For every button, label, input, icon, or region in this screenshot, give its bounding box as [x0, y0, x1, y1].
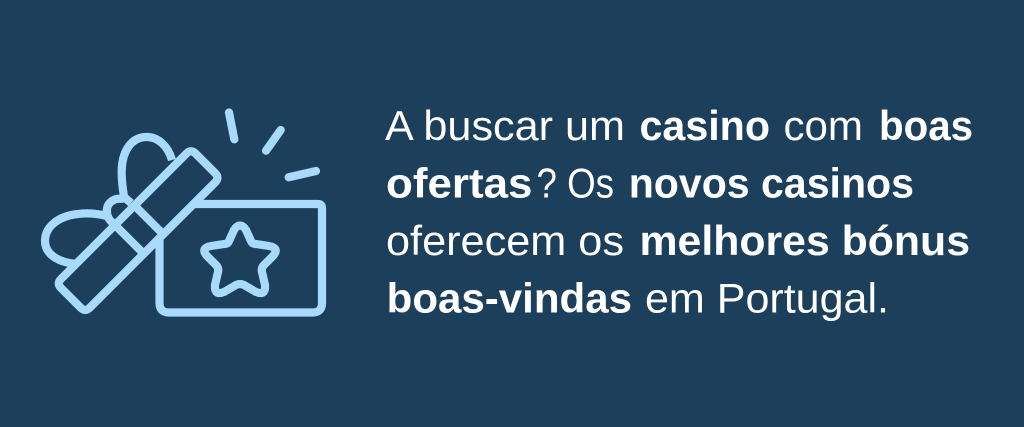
icon: star: [204, 226, 276, 293]
line 1: A buscar um: [385, 102, 625, 149]
line 3: oferecem os: [386, 217, 624, 264]
line 4: em Portugal.: [645, 274, 889, 322]
line 2: ofertas: [386, 160, 532, 206]
icon: ribbon band: [115, 206, 163, 254]
line 3: [386, 217, 970, 264]
line 2: [386, 160, 914, 206]
icon: open gift box: [45, 112, 322, 312]
line 1: com: [784, 102, 863, 149]
line 1: casino: [640, 102, 770, 149]
line 4: [387, 274, 889, 322]
line 1: boas: [879, 102, 973, 149]
icon: rotated lid: [59, 151, 217, 310]
line 3: melhores bónus: [640, 217, 970, 264]
icon: top bow loop: [122, 137, 172, 203]
line 2: ? Os: [536, 160, 614, 206]
line 4: boas-vindas: [387, 274, 632, 322]
line 2: novos casinos: [629, 160, 914, 206]
line 1: [385, 102, 973, 149]
icon: box body: [160, 204, 322, 312]
text block: headline: [385, 102, 973, 322]
icon: ribbon knot: [107, 199, 124, 223]
icon: left bow loop: [45, 213, 107, 264]
icon: spark lines: [229, 112, 316, 177]
